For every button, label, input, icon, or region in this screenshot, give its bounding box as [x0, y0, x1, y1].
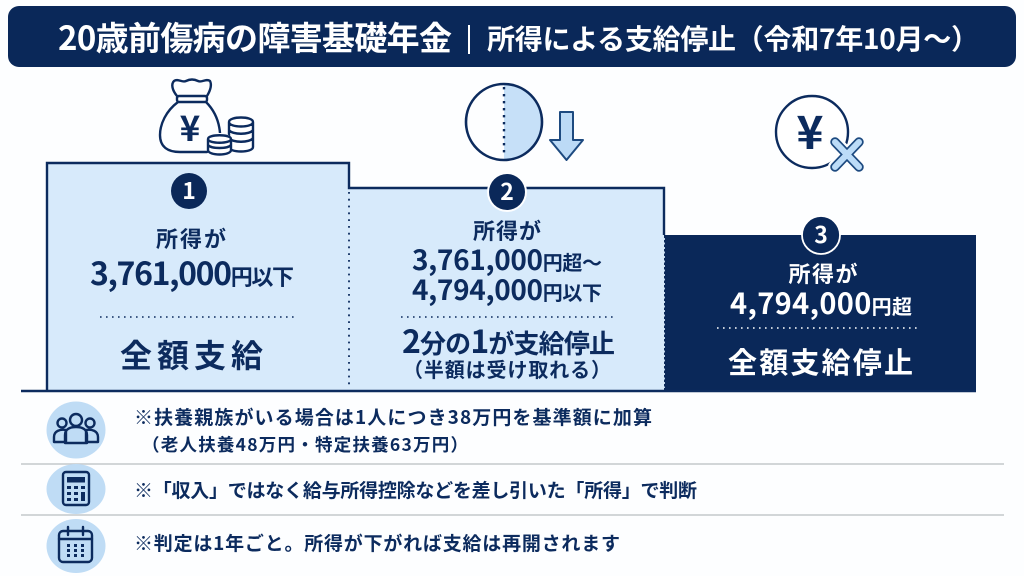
panel 1 background [47, 163, 349, 391]
baseline [21, 390, 976, 392]
panel 3 dotted rule [717, 327, 921, 329]
note 2 text: ※「収入」ではなく給与所得控除などを差し引いた「所得」で判断 [134, 476, 697, 503]
note row 1: dependents [46, 402, 652, 458]
note 3 text: ※判定は1年ごと。所得が下がれば支給は再開されます [134, 529, 620, 556]
panel 3 threshold: 4,794,000円超 [730, 281, 912, 323]
panel 2 result: 2分の1が支給停止 [402, 317, 615, 363]
icon: people [46, 402, 106, 458]
icon: calendar [46, 519, 106, 573]
panel 3: payment stopped [664, 235, 976, 391]
title: main: 20歳前傷病の障害基礎年金 [58, 12, 452, 60]
note 1 line 2: （老人扶養48万円・特定扶養63万円） [142, 432, 468, 457]
panel 1 result: 全額支給 [120, 331, 263, 377]
panel 1 number badge: 1 [182, 172, 196, 206]
staircase outline [47, 163, 664, 391]
icon: money bag and coins [160, 80, 253, 154]
panel 2 background [349, 188, 664, 391]
note row 2: income definition [46, 464, 697, 514]
divider between panels 1 and 2 [348, 192, 350, 388]
panel 3 number badge [802, 216, 840, 254]
title banner [8, 6, 1016, 67]
panel 1 threshold: 3,761,000円以下 [90, 249, 294, 295]
panel 2 number badge: 2 [500, 173, 514, 207]
panel 3 number badge: 3 [814, 216, 828, 250]
panel 1 label: 所得が [156, 222, 226, 254]
note 1 line 1: ※扶養親族がいる場合は1人につき38万円を基準額に加算 [134, 403, 652, 430]
panel 2: half payment [349, 188, 664, 391]
divider between panels 2 and 3 [663, 238, 665, 388]
panel 2 label: 所得が [473, 214, 541, 246]
icon: money bag and coins: ¥ [180, 101, 201, 152]
note row 3: annual review [46, 519, 620, 573]
row separator [21, 463, 1004, 465]
icon: yen coin with cross [776, 96, 859, 168]
title: sub: 所得による支給停止（令和7年10月〜） [487, 18, 979, 58]
panel 1 number badge [171, 172, 207, 209]
coin stack tall [229, 116, 253, 152]
icon: calculator [46, 464, 106, 514]
panel 1 dotted rule [100, 316, 294, 318]
row separator [21, 514, 1004, 516]
icon: half circle and down arrow [466, 84, 583, 160]
panel 2 lower threshold: 3,761,000円超〜 [412, 239, 602, 279]
panel 3 label: 所得が [788, 257, 858, 289]
coin stack short [208, 133, 231, 154]
panel 3 background [664, 235, 976, 391]
panel 1: full payment [47, 163, 349, 391]
panel 2 note: （半額は受け取れる） [403, 354, 611, 383]
panel 2 upper threshold: 4,794,000円以下 [412, 269, 602, 309]
panel 3 result: 全額支給停止 [728, 340, 913, 382]
icon: yen coin with cross: ¥ [796, 97, 824, 163]
title divider [468, 25, 470, 54]
panel 2 dotted rule [401, 316, 614, 318]
panel 2 number badge [487, 172, 527, 212]
